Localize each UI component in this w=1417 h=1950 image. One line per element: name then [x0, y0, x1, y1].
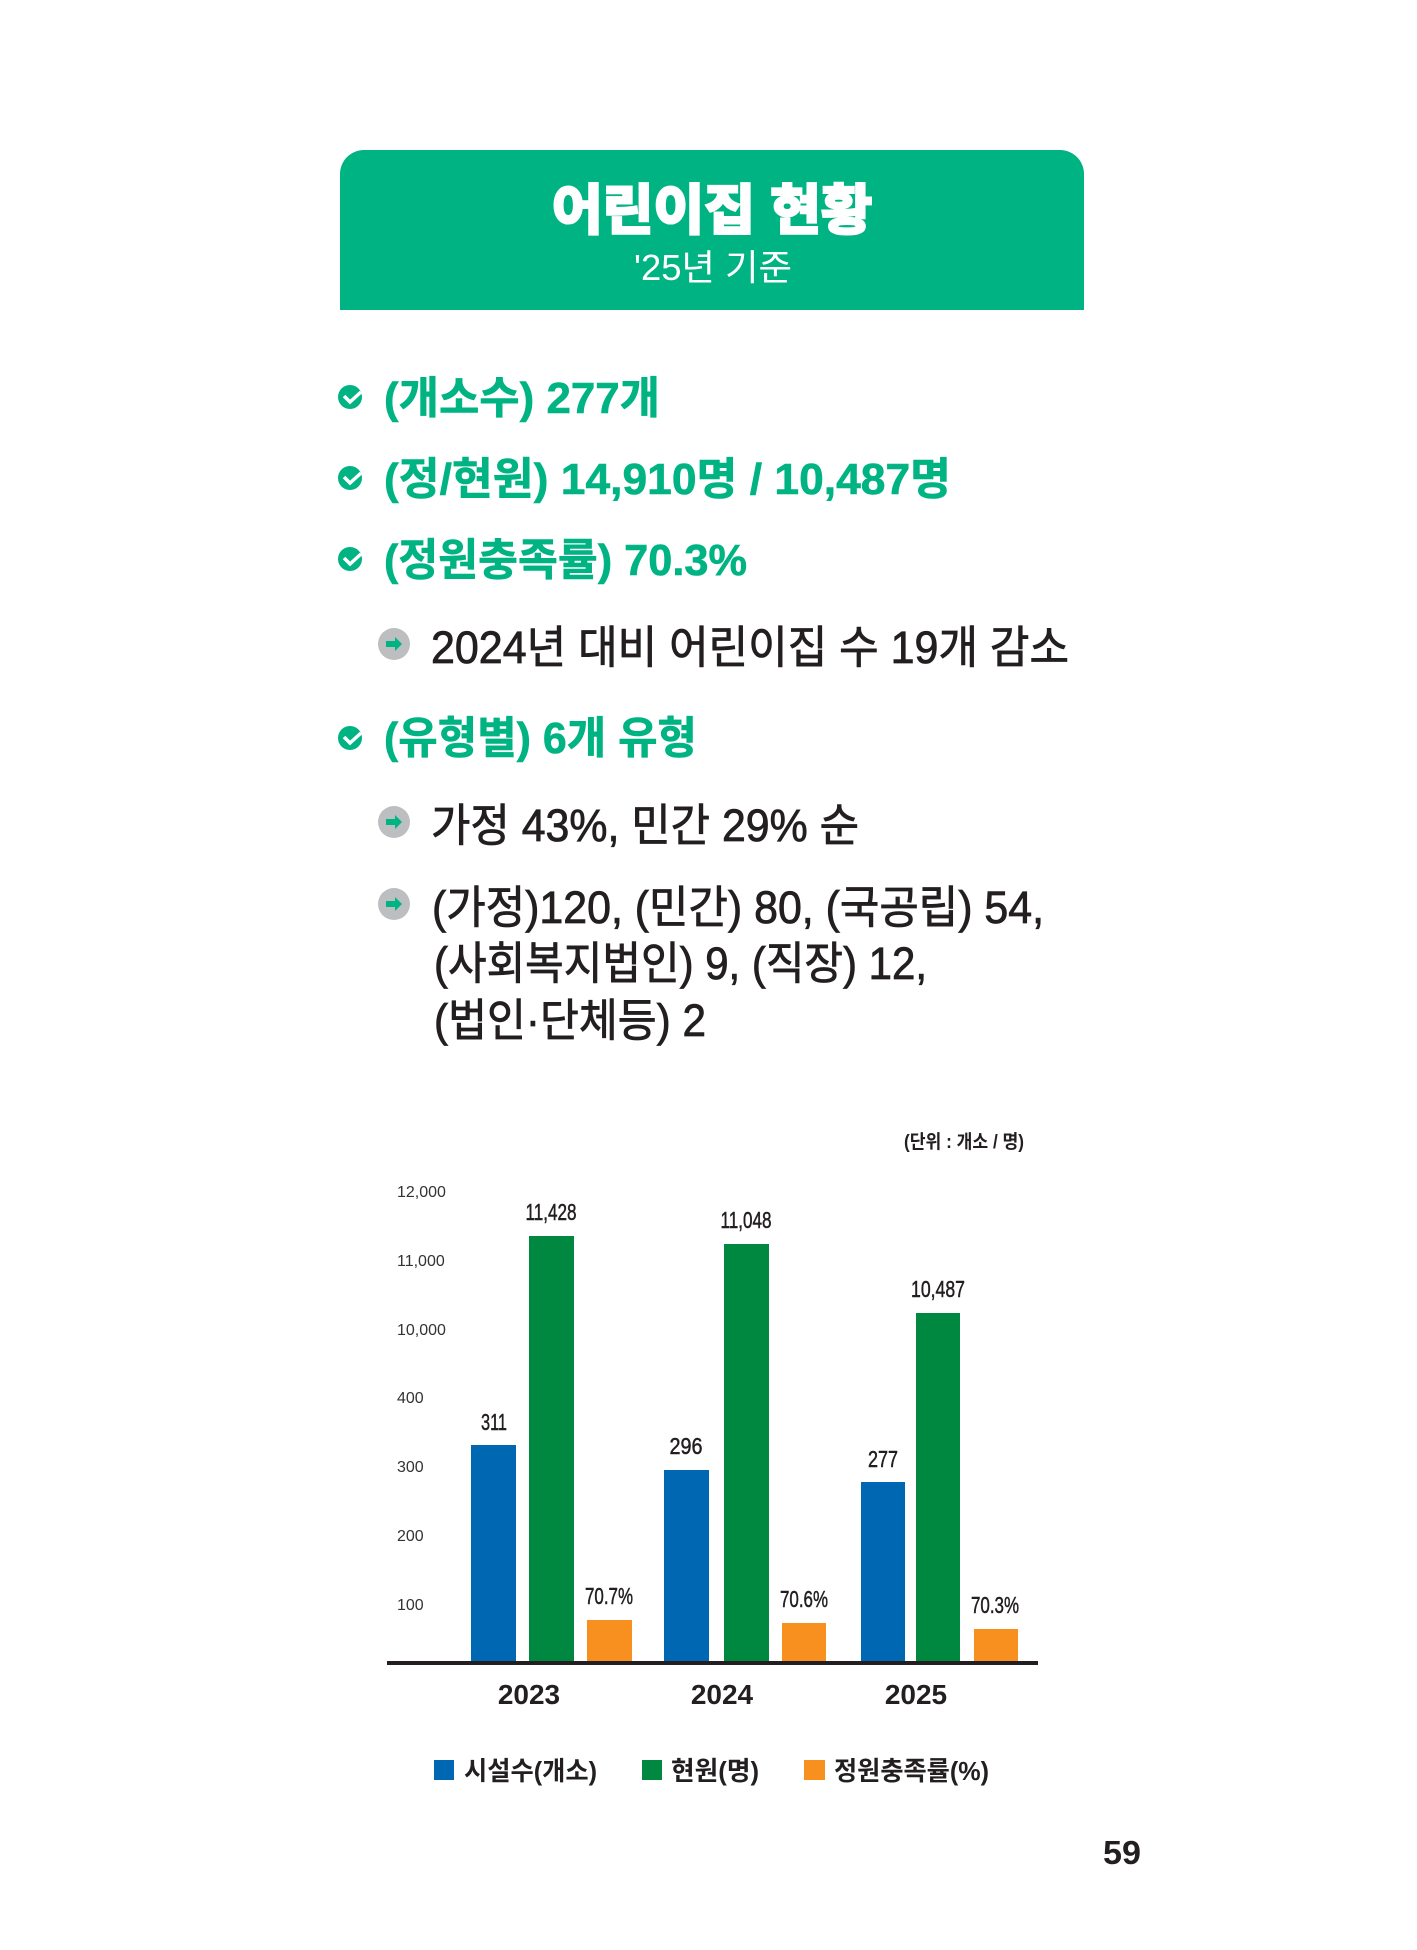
bars: 2023: [471, 1199, 633, 1662]
y axis labels: 12,000: [397, 1184, 446, 1201]
sub-bullet: share by type: 가정 43%, 민간 29% 순: [431, 800, 859, 851]
y axis labels: 300: [397, 1459, 424, 1476]
title: 어린이집 현황: [552, 181, 872, 241]
unit note: (단위 : 개소 / 명): [904, 1131, 1024, 1153]
bars: 2024: 296: [670, 1433, 702, 1459]
bars: 2025: 10,487: [911, 1276, 965, 1302]
bars: 2023: 311: [481, 1409, 507, 1435]
sub-bullet: counts by type: [378, 882, 1044, 1046]
sub-bullet: counts by type: (사회복지법인) 9, (직장) 12,: [434, 938, 927, 989]
year labels: 2025: [885, 1679, 947, 1710]
panel: header banner: [340, 150, 1084, 310]
year labels: 2024: [691, 1679, 754, 1710]
y axis labels: 100: [397, 1597, 424, 1614]
y axis labels: [397, 1184, 446, 1614]
y axis labels: 11,000: [397, 1253, 445, 1270]
page number: 59: [1103, 1834, 1141, 1871]
bullet: by type: (유형별) 6개 유형: [384, 714, 697, 763]
year labels: 2023: [498, 1679, 560, 1710]
y axis labels: 10,000: [397, 1322, 446, 1339]
y axis labels: 200: [397, 1528, 424, 1545]
bars: 2023: 11,428: [526, 1199, 576, 1225]
sub-bullet: counts by type: (법인·단체등) 2: [434, 995, 706, 1046]
legend: 정원충족률(%): [834, 1756, 989, 1786]
bar chart: [387, 1131, 1038, 1786]
sub-bullet: counts by type: (가정)120, (민간) 80, (국공립) 54,: [432, 882, 1044, 933]
bars: 2024: [664, 1207, 828, 1662]
bars: 2025: 277: [868, 1446, 898, 1472]
year labels: [498, 1679, 947, 1710]
bullet: fill rate: (정원충족률) 70.3%: [384, 536, 747, 585]
bars: 2025: [861, 1276, 1019, 1662]
subtitle: '25년 기준: [634, 247, 792, 288]
bars: 2025: 70.3%: [971, 1592, 1019, 1618]
legend: [434, 1756, 989, 1786]
panel: key facts list: [338, 374, 1069, 1046]
x axis: [387, 1661, 1038, 1665]
bullet: capacity and enrollment: (정/현원) 14,910명 / 10,487명: [384, 455, 951, 504]
y axis labels: 400: [397, 1390, 424, 1407]
bars: 2024: 11,048: [720, 1207, 772, 1233]
sub-bullet: year-on-year change: 2024년 대비 어린이집 수 19개 감소: [431, 622, 1069, 673]
bars: 2024: 70.6%: [780, 1586, 828, 1612]
legend: 시설수(개소): [464, 1756, 597, 1786]
bars: 2023: 70.7%: [585, 1583, 633, 1609]
bullet: facilities: (개소수) 277개: [384, 374, 660, 423]
legend: 현원(명): [671, 1756, 759, 1786]
